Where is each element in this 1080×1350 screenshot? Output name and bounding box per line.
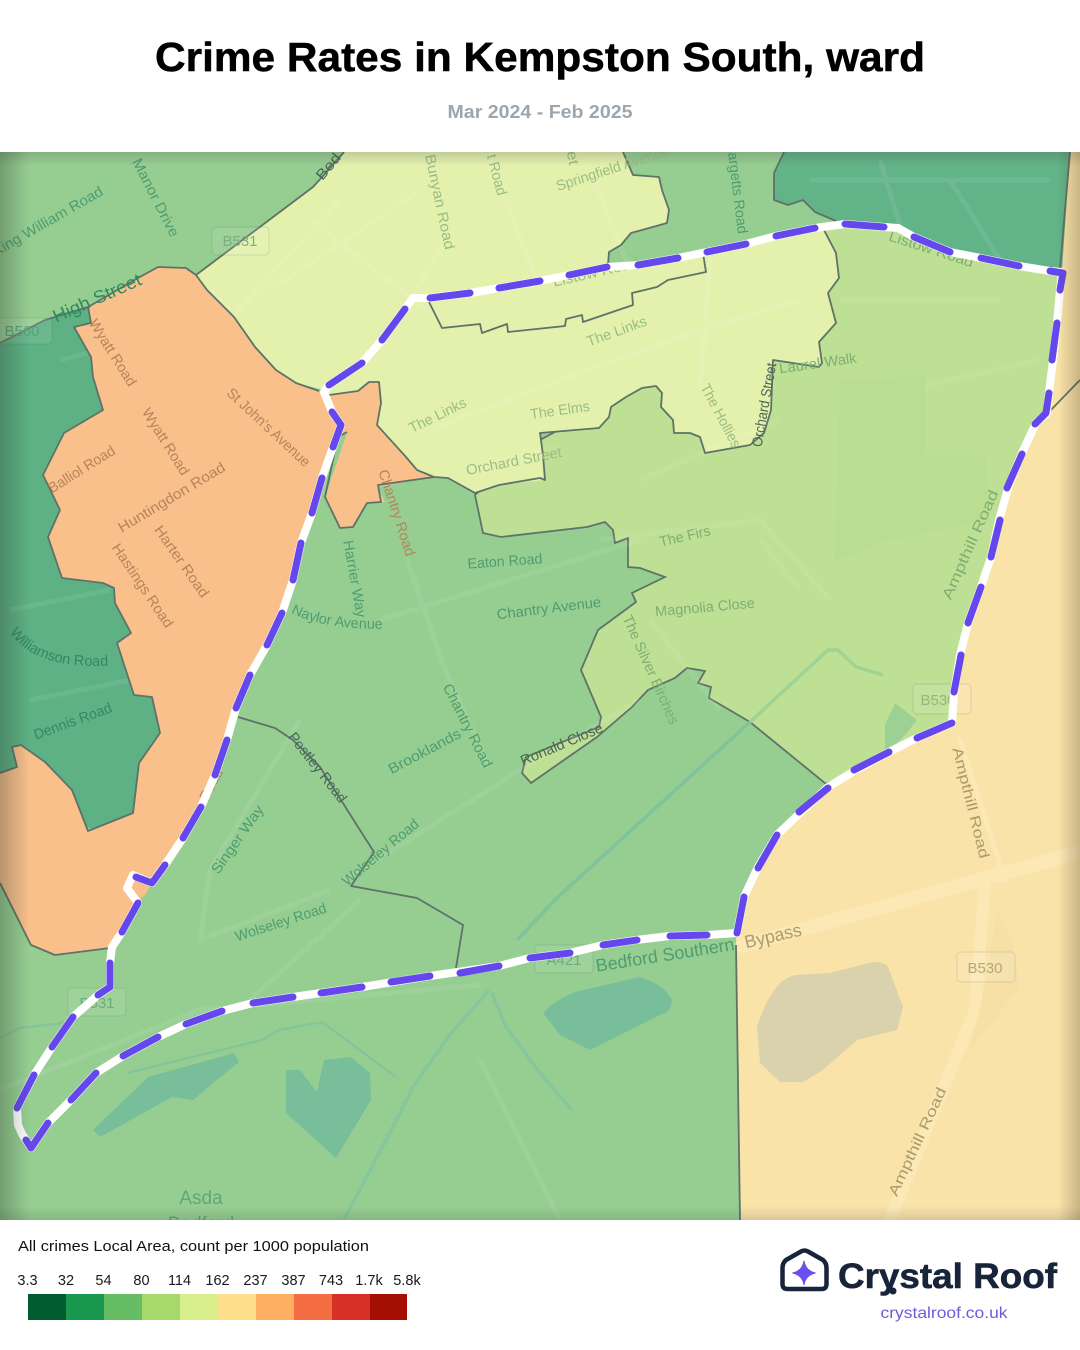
region: dark green west <box>0 308 159 828</box>
street labels: Singer Way <box>209 802 268 877</box>
street labels: Bedford <box>168 1214 234 1235</box>
logo wordmark y-drop accent <box>890 1288 896 1294</box>
ward outline: white casing <box>17 224 1062 1148</box>
street labels: Harter Road <box>150 523 212 601</box>
legend values: 32 <box>58 1273 74 1289</box>
region: orange high-crime west <box>0 267 340 955</box>
map base: medium green crime band <box>0 152 1080 1220</box>
road number labels <box>4 233 1003 1012</box>
water: east pond <box>885 703 917 750</box>
street labels: The Links <box>407 395 469 437</box>
street labels: Naylor Avenue <box>292 604 382 629</box>
road number labels: A421 <box>546 952 582 969</box>
road number shields <box>0 227 1015 1016</box>
road number labels: B560 <box>4 323 40 340</box>
street labels: The Links <box>585 314 649 350</box>
legend values: 3.3 <box>17 1273 38 1289</box>
legend values: 387 <box>281 1273 306 1289</box>
legend values: 5.8k <box>393 1273 421 1289</box>
street labels: Postley Road <box>285 730 349 806</box>
water: central pond <box>543 977 672 1050</box>
street labels: The Firs <box>658 523 712 551</box>
street labels: Ampthill Road <box>886 1085 950 1199</box>
streams <box>0 650 883 1220</box>
street labels: Listow Road <box>551 255 641 291</box>
street labels: Chantry Avenue <box>496 595 602 623</box>
street labels: Asda <box>179 1188 223 1209</box>
region: light yellow-green north <box>196 152 669 390</box>
street labels <box>0 152 998 1272</box>
road number labels: B530 <box>967 960 1003 977</box>
street labels: Bypass <box>742 920 804 952</box>
street labels: Harrier Way <box>339 539 369 620</box>
legend values: 1.7k <box>355 1273 383 1289</box>
legend values: 80 <box>133 1273 150 1289</box>
ward outline: purple dashes <box>17 224 1063 1148</box>
title: Crime Rates in Kempston South, ward <box>155 34 925 80</box>
water: heart-shaped lake <box>286 1057 371 1158</box>
subtitle: date range: Mar 2024 - Feb 2025 <box>448 102 632 122</box>
street labels: Orchard Street <box>465 445 563 479</box>
region: light yellow-green The Links <box>324 228 839 493</box>
street labels: Bunyan Road <box>421 153 457 251</box>
street labels: Bedford Southern <box>594 934 736 976</box>
street labels: St John's Avenue <box>223 385 313 471</box>
woodland patch: tan area <box>976 1000 982 1022</box>
street labels: et <box>563 150 581 166</box>
street labels: Huntingdon Road <box>116 460 228 536</box>
street labels: Laurel Walk <box>778 351 858 377</box>
street labels: Williamson Road <box>12 626 108 666</box>
street labels: Wyatt Road <box>138 406 192 478</box>
water: tan lake <box>757 962 903 1082</box>
road number labels: B531 <box>79 995 115 1012</box>
street labels: Ampthill Road <box>948 746 992 860</box>
legend values: 114 <box>168 1273 191 1289</box>
street labels: Listow Road <box>887 229 975 271</box>
street labels: The Silver Birches <box>619 613 681 727</box>
street labels: Ampthill Road <box>940 488 1002 602</box>
road number labels: B530 <box>920 692 956 709</box>
street labels: Road <box>197 766 227 804</box>
region: mid yellow-green east <box>475 223 1062 784</box>
water: south-west lake <box>93 1053 239 1137</box>
street labels: Dennis Road <box>32 700 114 744</box>
road number labels: B531 <box>222 233 258 250</box>
roads on tan area <box>742 740 1080 1220</box>
legend values: 162 <box>205 1273 230 1289</box>
street labels: argetts Road <box>724 151 750 235</box>
legend values: 54 <box>95 1273 112 1289</box>
street labels: Wyatt Road <box>85 317 139 389</box>
street labels: t Road <box>483 153 509 197</box>
street labels: Hastings Road <box>108 541 176 631</box>
field patch: east fields <box>860 383 925 402</box>
legend values: 237 <box>243 1273 268 1289</box>
street labels: Brooklands <box>386 726 464 778</box>
logo url: crystalroof.co.uk <box>880 1305 1009 1322</box>
buildings: orange area <box>88 458 270 578</box>
logo: Crystal Roof <box>782 1250 1057 1322</box>
logo wordmark: Crystal Roof <box>838 1257 1057 1296</box>
street labels: High Street <box>50 270 144 326</box>
faint street network <box>10 160 1050 772</box>
street labels: Chantry Road <box>374 468 418 558</box>
street labels: Orchard Street <box>750 362 780 448</box>
map edge vignette <box>0 152 1080 1220</box>
region: dark green north-east <box>774 152 1070 272</box>
street labels: Bed <box>313 150 345 184</box>
street labels: Balliol Road <box>46 443 118 497</box>
legend colour bar <box>28 1294 407 1320</box>
legend values <box>17 1273 421 1289</box>
street labels: Eaton Road <box>467 551 543 573</box>
icon: house with sparkle <box>782 1250 826 1289</box>
street labels: Springfield Avenue <box>554 143 672 195</box>
ward boundary lines <box>0 152 1080 1220</box>
legend <box>17 1238 421 1320</box>
street labels: Chantry Road <box>439 681 495 771</box>
street labels: Wolseley Road <box>233 901 329 945</box>
legend values: 743 <box>319 1273 343 1289</box>
region: tan south-east <box>736 152 1080 1220</box>
street labels: The Elms <box>529 399 591 423</box>
region: orange blob east of road <box>325 382 434 528</box>
street labels: Magnolia Close <box>654 596 756 620</box>
street labels: The Hollies <box>697 381 743 451</box>
street labels: Manor Drive <box>128 156 182 240</box>
street labels: Wolseley Road <box>339 816 423 890</box>
legend title: All crimes Local Area, count per 1000 population <box>18 1238 369 1255</box>
street labels: Ronald Close <box>518 720 606 770</box>
